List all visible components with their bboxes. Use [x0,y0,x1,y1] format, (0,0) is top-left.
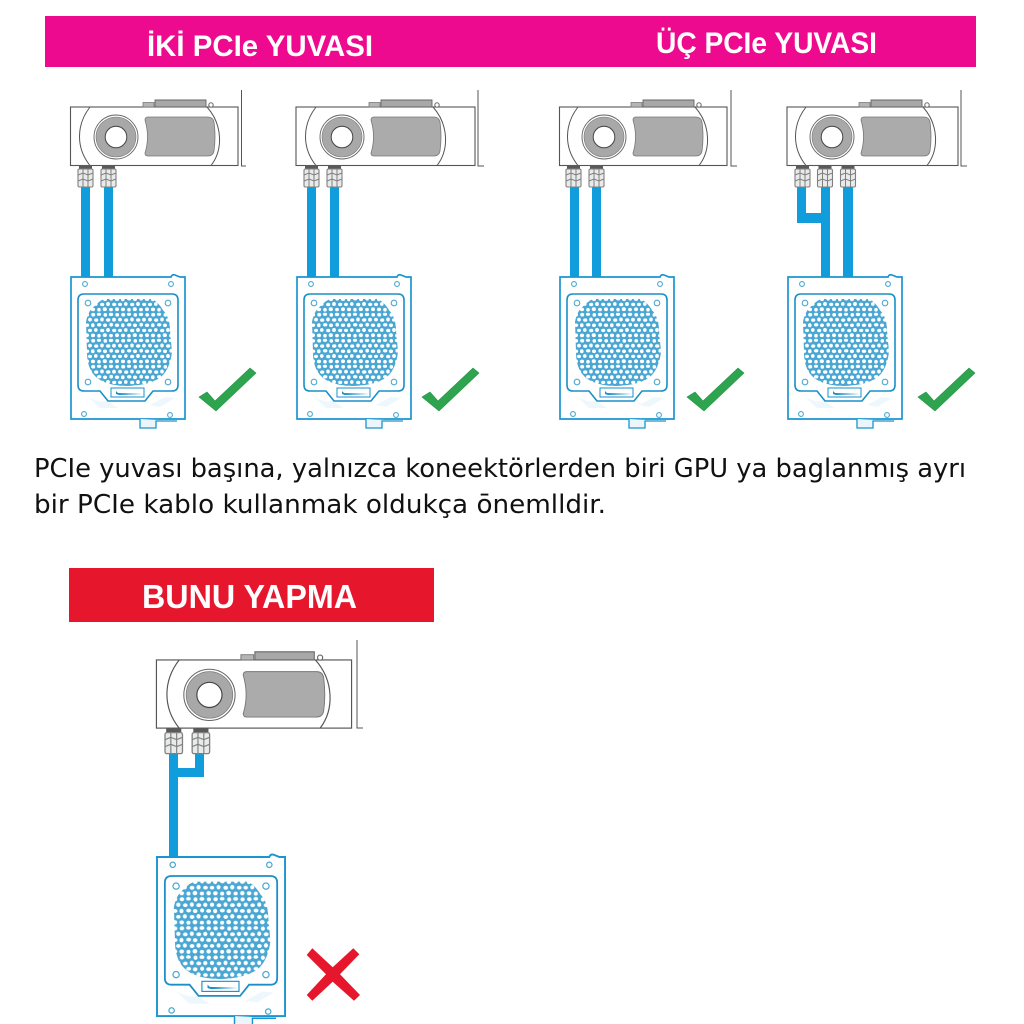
check mark 3 [687,368,744,411]
diagram 3: three slots, two cables [560,90,744,428]
diagram 4: three slots, split cable [787,90,975,428]
header: magenta banner [45,16,976,67]
split cable 5 [169,750,204,858]
power supply 1 [71,275,185,428]
heading: three slots: ÜÇ PCIe YUVASI [656,27,877,60]
diagram 5: incorrect split cable [156,640,363,1024]
check mark 1 [199,368,256,411]
power supply 5 [157,854,285,1024]
power supply 4 [788,275,902,428]
power supply 3 [560,275,674,428]
cross mark [307,948,360,1001]
bracket 5 [357,640,363,728]
cables 3 [570,186,601,278]
GPU 4 [787,90,967,166]
connectors 3 [566,165,604,187]
GPU 5 [156,652,352,728]
diagram 2: two slots, two cables [296,90,484,428]
GPU 1 [70,90,246,166]
power supply 2 [297,275,411,428]
cables 1 [81,186,113,278]
connectors 5 [165,728,210,754]
body text [34,454,966,520]
body text: bir PCIe kablo kullanmak oldukça ōnemlldir. [34,490,606,520]
check mark 4 [918,368,975,411]
warning banner: do not: BUNU YAPMA [142,578,357,615]
cables 4 [797,186,853,278]
warning banner: do not [69,568,434,622]
GPU 3 [560,90,737,166]
diagram 1: two slots, two cables [70,90,256,428]
cables 2 [307,186,339,278]
connectors 1 [78,165,116,187]
GPU 2 [296,90,484,166]
connectors 2 [304,165,342,187]
heading: two slots: İKİ PCIe YUVASI [147,30,373,63]
body text: PCIe yuvası başına, yalnızca koneektörlerden biri GPU ya baglanmış ayrı [34,454,966,484]
connectors 4 [795,165,856,187]
check mark 2 [422,368,479,411]
